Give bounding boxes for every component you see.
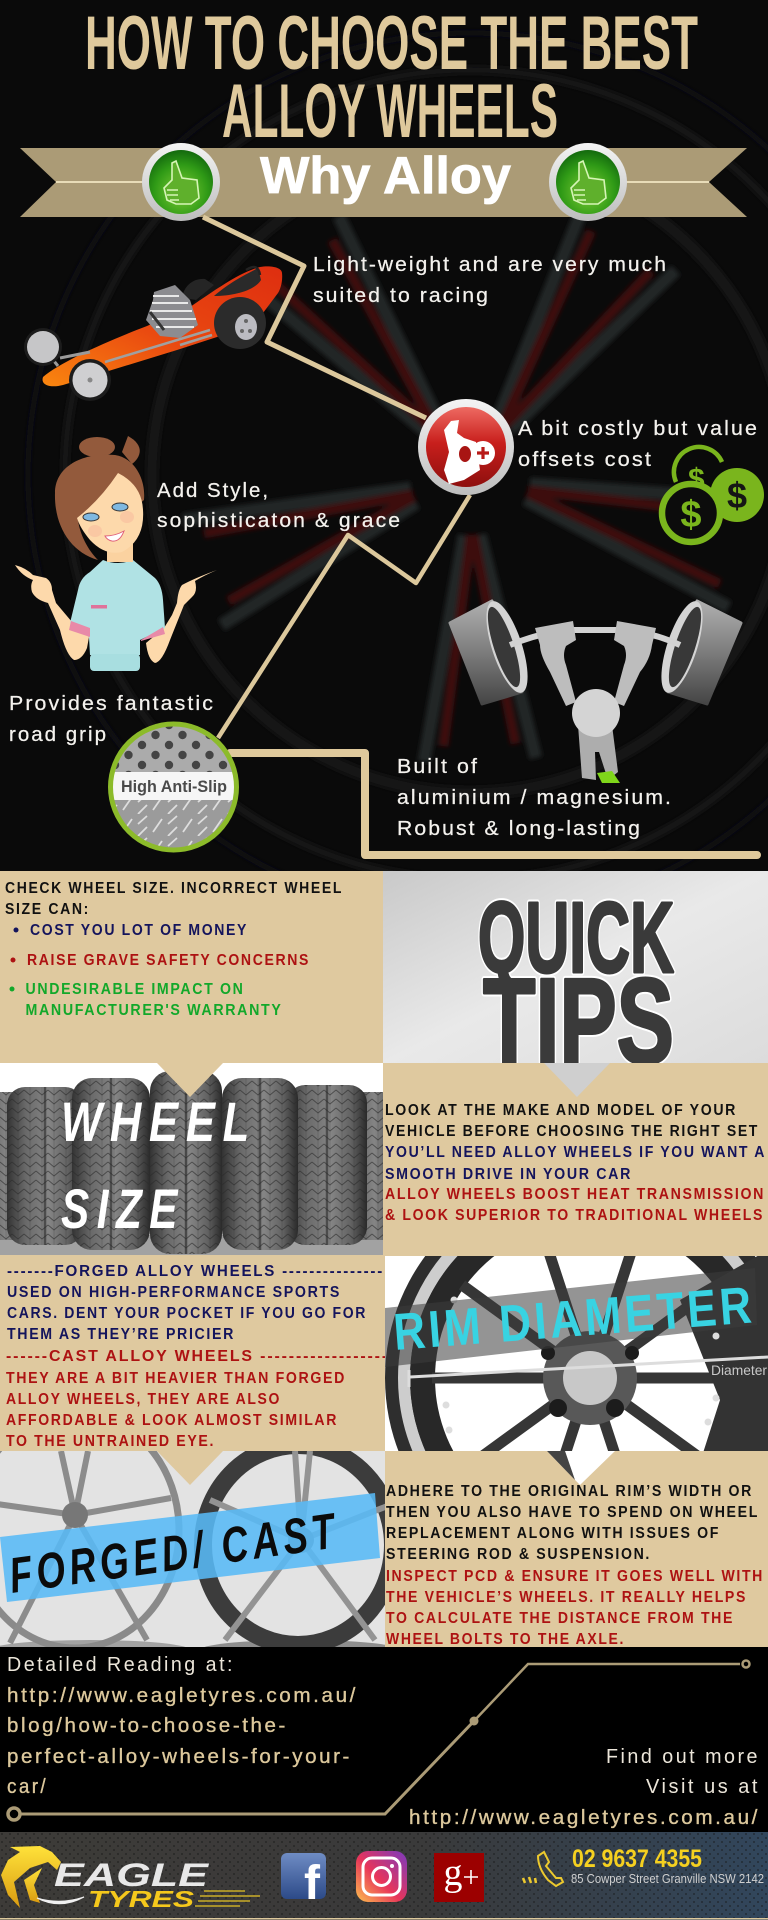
- text: road grip: [9, 692, 215, 746]
- icon: money coins: [662, 447, 764, 542]
- panel: check wheel size: SIZE CAN:: [5, 901, 90, 918]
- icon: google plus: [434, 1852, 484, 1902]
- icon: wheel barbell figure: [450, 597, 741, 783]
- panel: forged and cast text: -------FORGED ALLOY WHEELS ---------------: [7, 1263, 384, 1280]
- tyres: [0, 1071, 397, 1254]
- icon: money coins: $: [680, 494, 702, 536]
- text: built of: Robust & long-lasting: [397, 817, 642, 840]
- text: costly: offsets cost: [518, 448, 653, 471]
- logo: eagle tyres: [1, 1846, 260, 1912]
- heading: Why Alloy: Why Alloy: [260, 147, 511, 205]
- left weight: [450, 601, 522, 704]
- icon: phone: [523, 1852, 563, 1886]
- diameter bar: [410, 1357, 768, 1377]
- shirt: [70, 560, 165, 655]
- text: road grip: road grip: [9, 723, 108, 746]
- panel: check wheel size: MANUFACTURER'S WARRANTY: [26, 1002, 282, 1019]
- panel: quick tips image: TIPS: [483, 953, 674, 1089]
- icon: money coins: $: [688, 463, 705, 496]
- heading: wheel size: [61, 1090, 257, 1240]
- panel: brand band: [0, 1832, 768, 1920]
- text: add style: [157, 479, 402, 532]
- bar: [510, 630, 680, 645]
- icon: dragster car: [24, 266, 282, 401]
- panel: rim width tips: TO CALCULATE THE DISTANCE FROM THE: [386, 1610, 734, 1627]
- icon: thumbs up right: [549, 143, 627, 221]
- connector line: top to cost: [203, 217, 426, 418]
- panel: quick tips image: [383, 871, 768, 1089]
- panel: wheel size image: [0, 1063, 397, 1255]
- circuit line: [8, 1660, 750, 1820]
- text: find out more: http://www.eagletyres.com.au/: [409, 1806, 760, 1829]
- face: [77, 473, 143, 553]
- panel: forged and cast text: THEY ARE A BIT HEAVIER THAN FORGED: [6, 1370, 346, 1387]
- text: find out more: [409, 1745, 760, 1829]
- panel: check wheel size: UNDESIRABLE IMPACT ON: [26, 981, 244, 998]
- icon: high anti-slip badge: [108, 722, 240, 854]
- text: light-weight: suited to racing: [313, 284, 490, 307]
- panel: rim width tips: STEERING ROD & SUSPENSION.: [386, 1546, 651, 1563]
- panel: forged and cast text: [0, 1255, 389, 1451]
- icon: facebook: f: [304, 1857, 321, 1910]
- panel: make and model tips: SMOOTH DRIVE IN YOUR CAR: [385, 1166, 632, 1183]
- text: built of: Built of: [397, 755, 479, 778]
- front wheels: [24, 328, 62, 366]
- icon: thumbs up left: [142, 143, 220, 221]
- panel: forged and cast text: CARS. DENT YOUR POCKET IF YOU GO FOR: [7, 1305, 367, 1322]
- text: find out more: Visit us at: [646, 1775, 760, 1798]
- heading: forged cast: FORGED/ CAST: [6, 1502, 342, 1604]
- text: detailed reading: perfect-alloy-wheels-for-your-: [7, 1745, 352, 1768]
- text: detailed reading: Detailed Reading at:: [7, 1653, 235, 1676]
- text: light-weight: Light-weight and are very much: [313, 253, 668, 276]
- panel: quick tips image: TIPS: [483, 953, 674, 1089]
- hair back: [79, 437, 115, 457]
- text: built of: aluminium / magnesium.: [397, 786, 673, 809]
- panel: forged and cast text: USED ON HIGH-PERFORMANCE SPORTS: [7, 1284, 341, 1301]
- panel: check wheel size: RAISE GRAVE SAFETY CONCERNS: [27, 952, 310, 969]
- text: built of: [397, 755, 673, 840]
- blue band: [0, 1493, 380, 1602]
- panel: rim diameter image: [385, 1256, 768, 1451]
- rear wheel: [214, 297, 266, 349]
- heading: wheel size: SIZE: [61, 1177, 185, 1240]
- arms and hands: [535, 621, 576, 706]
- panel: make and model tips: [383, 1063, 768, 1256]
- wheels: [0, 1451, 385, 1647]
- text: phone and address: [571, 1845, 764, 1886]
- text: add style: sophisticaton & grace: [157, 509, 402, 532]
- text: detailed reading: [7, 1653, 358, 1798]
- panel: check wheel size: CHECK WHEEL SIZE. INCORRECT WHEEL: [5, 880, 343, 897]
- panel: footer links: [0, 1647, 768, 1832]
- panel: make and model tips: LOOK AT THE MAKE AND MODEL OF YOUR: [385, 1102, 737, 1119]
- logo: eagle tyres: TYRES: [88, 1886, 195, 1912]
- text: costly: [518, 417, 759, 471]
- text: detailed reading: car/: [7, 1775, 48, 1798]
- text: road grip: Provides fantastic: [9, 692, 215, 715]
- panel: forged and cast text: AFFORDABLE & LOOK ALMOST SIMILAR: [6, 1412, 338, 1429]
- alloy rim: [385, 1256, 768, 1451]
- text: detailed reading: blog/how-to-choose-the-: [7, 1714, 288, 1737]
- connector line: grip to built: [230, 753, 757, 855]
- text: add style: Add Style,: [157, 479, 270, 502]
- panel: forged and cast text: ALLOY WHEELS, THEY ARE ALSO: [6, 1391, 281, 1408]
- title: [85, 1, 698, 154]
- heading: wheel size: WHEEL: [61, 1090, 257, 1153]
- panel: check wheel size: [0, 871, 384, 1063]
- icon: instagram: [356, 1851, 407, 1902]
- icon: red OK hand: [418, 399, 514, 495]
- panel: forged cast image: [0, 1451, 385, 1647]
- icon: money coins: $: [727, 475, 747, 516]
- text: find out more: Find out more: [606, 1745, 760, 1768]
- panel: check wheel size: COST YOU LOT OF MONEY: [30, 922, 248, 939]
- text: phone and address: 02 9637 4355: [572, 1845, 702, 1873]
- ribbon: Why Alloy: [20, 147, 747, 217]
- panel: rim diameter image: Diameter: [711, 1362, 767, 1378]
- panel: forged and cast text: THEM AS THEY’RE PRICIER: [7, 1326, 235, 1343]
- connector line: cost to grip: [218, 495, 470, 738]
- panel: forged and cast text: TO THE UNTRAINED EYE.: [6, 1433, 215, 1450]
- icon: high anti-slip badge: High Anti-Slip: [121, 777, 227, 796]
- neck: [107, 540, 133, 562]
- arms: [15, 565, 89, 660]
- icon: google plus: g: [444, 1852, 462, 1894]
- panel: rim width tips: WHEEL BOLTS TO THE AXLE.: [386, 1631, 625, 1648]
- body: [578, 725, 618, 780]
- panel: rim width tips: REPLACEMENT ALONG WITH ISSUES OF: [386, 1525, 720, 1542]
- panel: hero background: [0, 0, 768, 917]
- panel: rim width tips: [385, 1451, 768, 1648]
- logo: eagle tyres: EAGLE: [54, 1857, 210, 1893]
- panel: forged and cast text: ------CAST ALLOY WHEELS ------------------: [6, 1348, 389, 1365]
- text: detailed reading: http://www.eagletyres.com.au/: [7, 1684, 358, 1707]
- text: costly: A bit costly but value: [518, 417, 759, 440]
- icon: woman pointing: [15, 436, 217, 671]
- text: light-weight: [313, 253, 668, 307]
- background alloy wheel: [28, 33, 768, 917]
- right weight: [668, 601, 741, 704]
- icon: facebook: [281, 1853, 326, 1910]
